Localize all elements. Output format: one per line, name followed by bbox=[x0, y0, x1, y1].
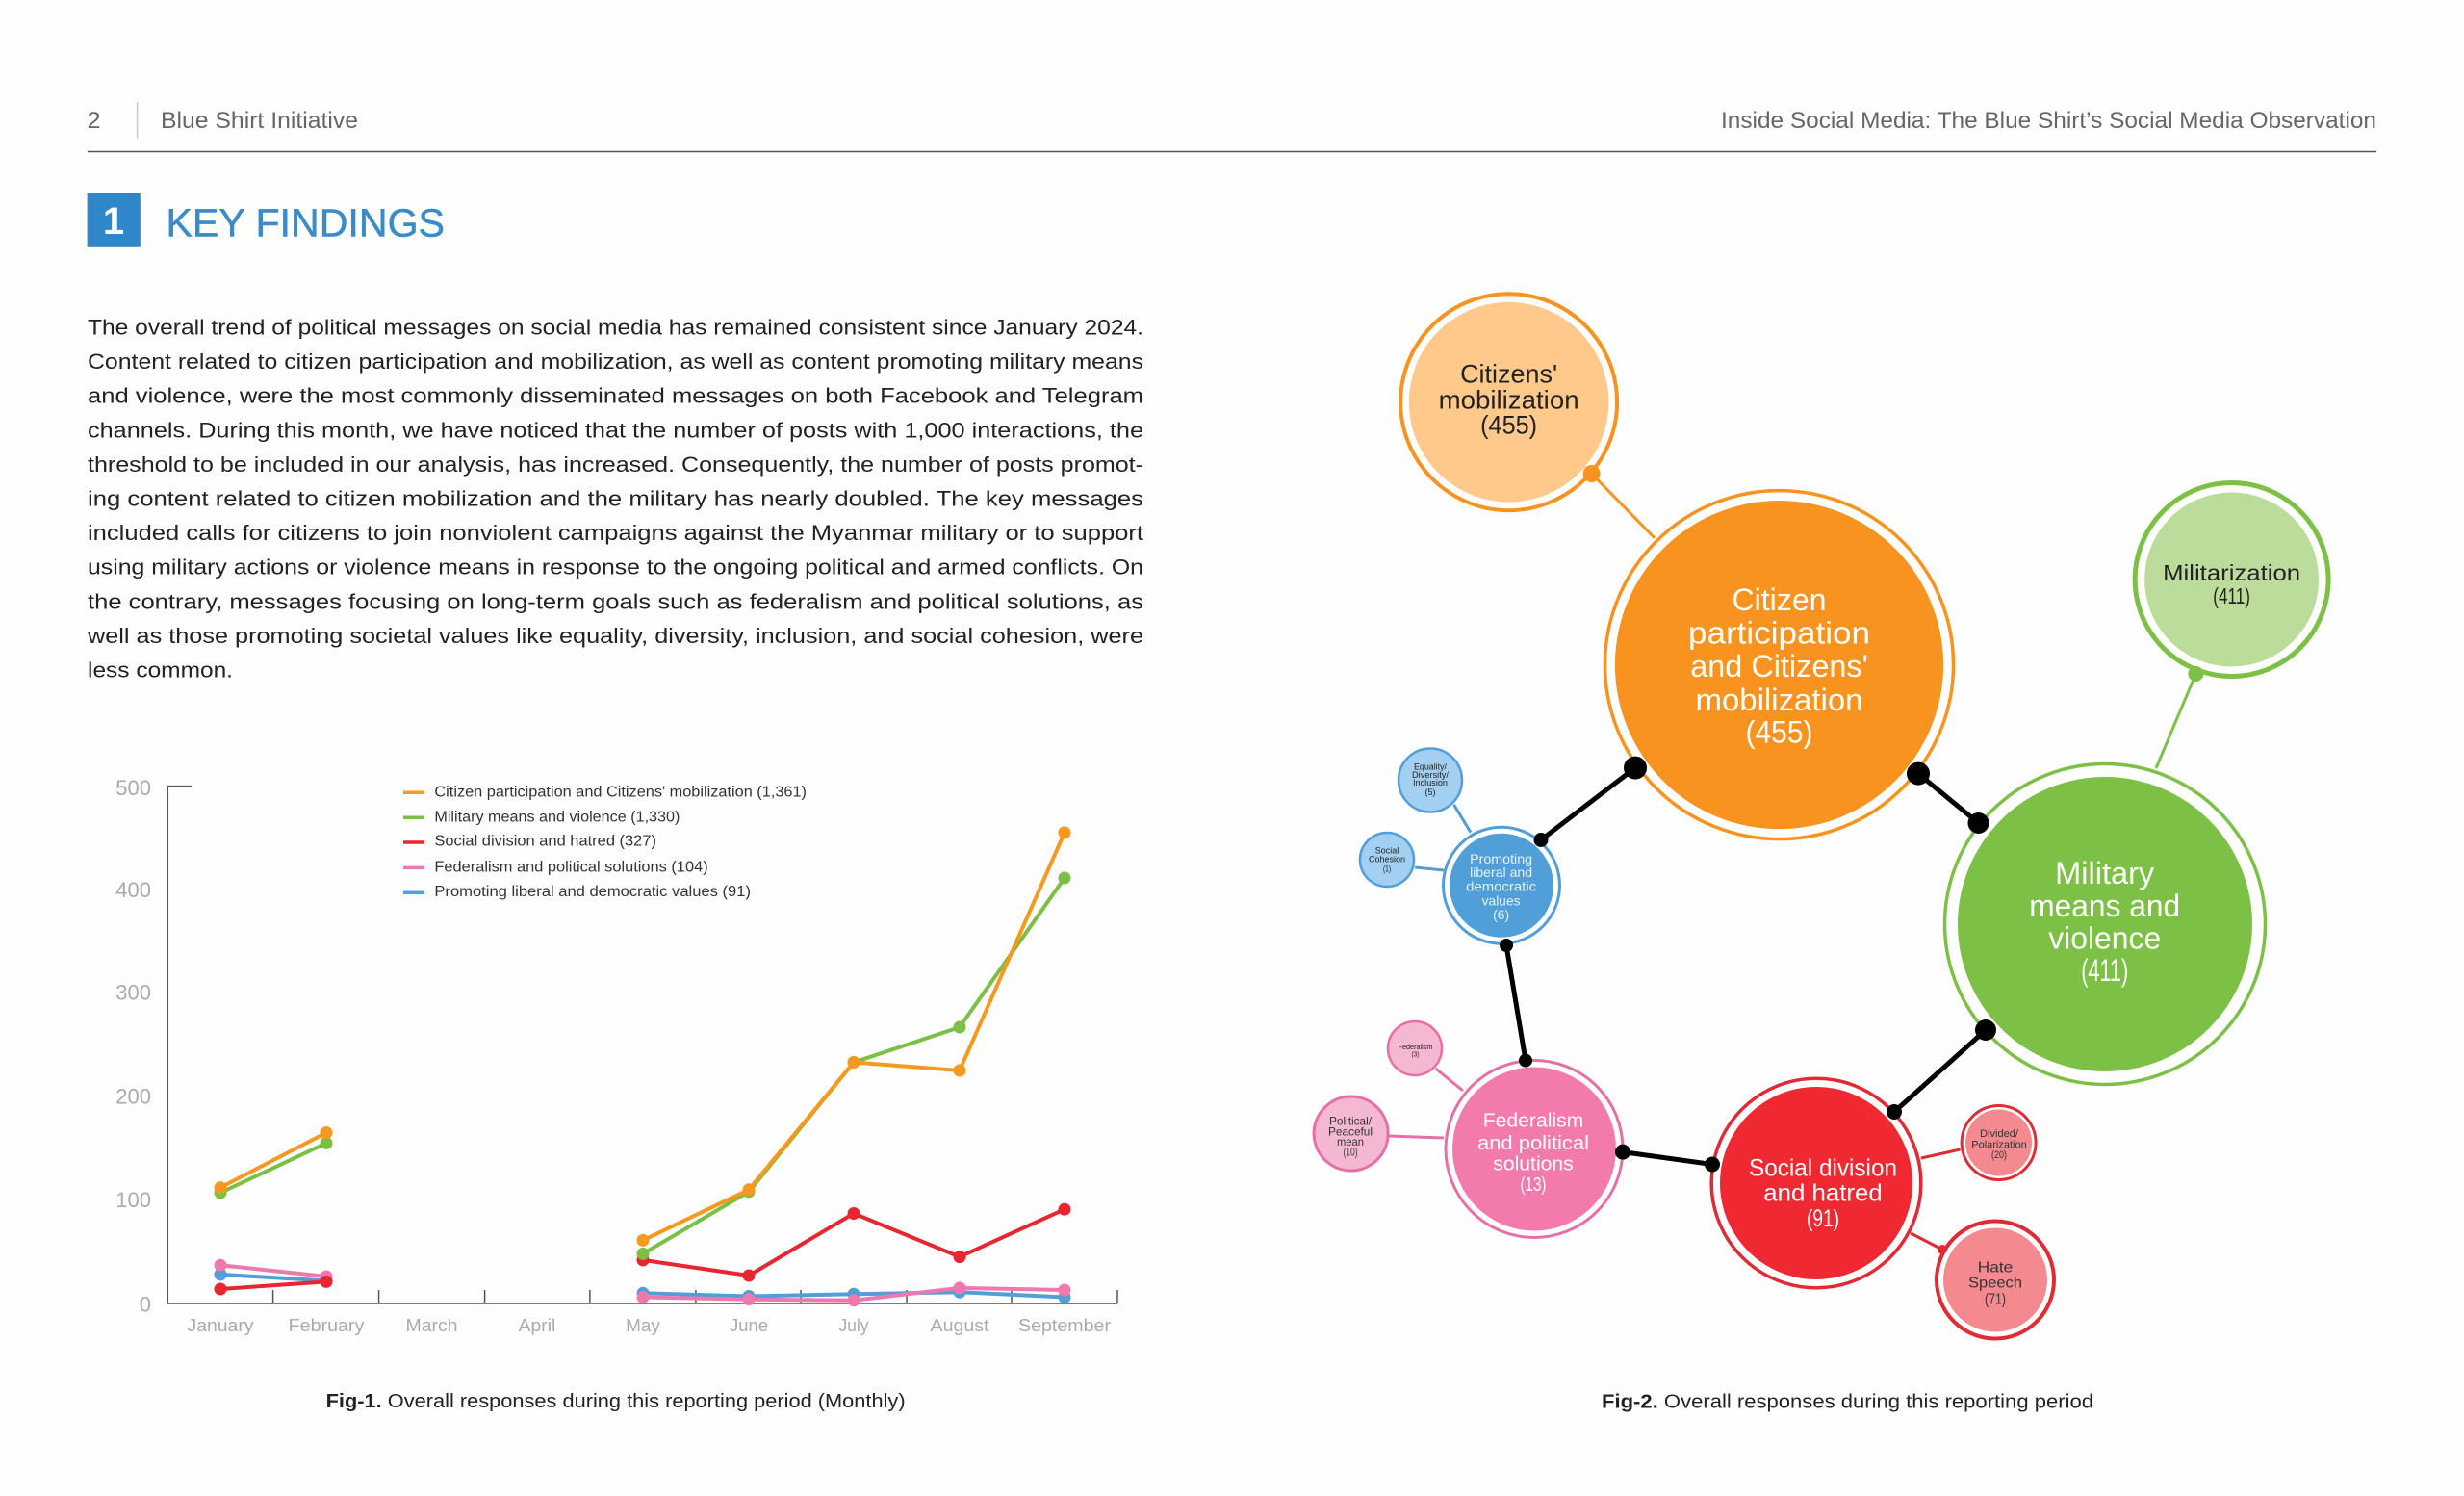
series: military means and violence bbox=[214, 872, 1070, 1260]
caption: figure 1: Fig-1. Overall responses during this reporting period (Monthly) bbox=[326, 1391, 906, 1412]
body paragraph: The overall trend of political messages on social media has remained consistent since January 2024. bbox=[88, 316, 1143, 339]
bubble: militarization: (411) bbox=[2213, 583, 2250, 608]
y axis labels: 100 bbox=[116, 1188, 151, 1212]
x axis labels: July bbox=[839, 1316, 868, 1335]
bubble: citizen participation: and Citizens' bbox=[1690, 649, 1868, 684]
chart legend: Promoting liberal and democratic values (91) bbox=[434, 884, 751, 900]
bubble: divided polarization: Polarization bbox=[1971, 1139, 2027, 1150]
bubble: militarization bbox=[2135, 483, 2328, 682]
body paragraph: and violence, were the most commonly disseminated messages on both Facebook and Telegram bbox=[88, 384, 1143, 408]
bubble: promoting liberal and democratic values: (6) bbox=[1493, 907, 1509, 922]
x axis labels: June bbox=[730, 1316, 768, 1335]
bubble: equality diversity inclusion: Equality/ bbox=[1414, 762, 1447, 772]
chart legend bbox=[403, 784, 807, 900]
bubble: federalism and political solutions: Federalism bbox=[1483, 1111, 1583, 1132]
body paragraph: less common. bbox=[88, 658, 233, 682]
bubble: promoting liberal and democratic values: Promoting bbox=[1470, 851, 1532, 866]
x axis labels: May bbox=[626, 1316, 660, 1335]
bubble: promoting liberal and democratic values: values bbox=[1482, 892, 1521, 908]
page header: Inside Social Media: The Blue Shirt’s Social Media Observation bbox=[1721, 108, 2376, 134]
bubble: divided polarization: Divided/ bbox=[1980, 1128, 2019, 1140]
body paragraph: channels. During this month, we have noticed that the number of posts with 1,000 interactions, the bbox=[88, 418, 1143, 442]
bubble: promoting liberal and democratic values: liberal and bbox=[1470, 864, 1532, 880]
x axis labels: August bbox=[930, 1316, 989, 1335]
x axis labels: March bbox=[406, 1316, 458, 1335]
section heading: key findings bbox=[88, 193, 445, 247]
bubble: military means and violence: Military bbox=[2055, 856, 2154, 890]
bubble: hate speech bbox=[1937, 1221, 2054, 1338]
connector end dots bbox=[1500, 757, 1996, 1173]
bubble: federalism and political solutions: solutions bbox=[1493, 1153, 1574, 1174]
body paragraph: the contrary, messages focusing on long-term goals such as federalism and political solutions, as bbox=[88, 589, 1143, 613]
bubble: militarization: Militarization bbox=[2163, 560, 2300, 585]
bubble: federalism: Federalism bbox=[1398, 1043, 1432, 1051]
bubble: social division and hatred bbox=[1711, 1078, 1921, 1288]
bubble: equality diversity inclusion: Inclusion bbox=[1413, 778, 1448, 788]
bubble: political peaceful mean bbox=[1314, 1096, 1388, 1171]
line chart: monthly responses bbox=[116, 776, 1117, 1335]
bubble: political peaceful mean: mean bbox=[1337, 1135, 1364, 1148]
bubble: social cohesion: (1) bbox=[1383, 864, 1391, 874]
series: promoting liberal and democratic values bbox=[214, 1268, 1070, 1303]
y axis labels: 200 bbox=[116, 1084, 151, 1109]
body paragraph: using military actions or violence means in response to the ongoing political and armed conflicts. On bbox=[88, 555, 1143, 580]
page header bbox=[87, 102, 2376, 152]
chart legend: Military means and violence (1,330) bbox=[434, 809, 680, 826]
bubble diagram: overall responses bbox=[1314, 294, 2328, 1339]
page header: Blue Shirt Initiative bbox=[161, 108, 358, 134]
bubble: promoting liberal and democratic values: democratic bbox=[1466, 879, 1536, 894]
bubble: divided polarization bbox=[1962, 1105, 2036, 1180]
bubble: social cohesion: Cohesion bbox=[1369, 855, 1405, 864]
bubble: political peaceful mean: Political/ bbox=[1329, 1115, 1373, 1128]
x axis labels: February bbox=[289, 1316, 364, 1335]
bubble: federalism and political solutions: (13) bbox=[1521, 1174, 1546, 1196]
series: citizen participation bbox=[214, 826, 1070, 1247]
bubble: equality diversity inclusion bbox=[1399, 749, 1462, 812]
thin connectors bbox=[1389, 474, 2195, 1250]
bubble: military means and violence: (411) bbox=[2081, 953, 2128, 988]
y axis labels: 300 bbox=[116, 980, 151, 1005]
bubble: political peaceful mean: Peaceful bbox=[1328, 1124, 1373, 1138]
bubble: federalism and political solutions: and political bbox=[1477, 1133, 1589, 1154]
bubble: citizens' mobilization: (455) bbox=[1480, 410, 1537, 439]
x axis labels bbox=[187, 1316, 1111, 1335]
bubble: federalism bbox=[1388, 1021, 1442, 1075]
bubble: hate speech: Hate bbox=[1978, 1259, 2013, 1277]
bubble: military means and violence: violence bbox=[2048, 920, 2161, 955]
bubble: citizen participation: Citizen bbox=[1732, 582, 1827, 617]
bubble: citizens' mobilization: mobilization bbox=[1439, 386, 1579, 415]
chart legend: Federalism and political solutions (104) bbox=[434, 859, 708, 876]
bubble: hate speech: Speech bbox=[1968, 1275, 2022, 1292]
body paragraph: Content related to citizen participation and mobilization, as well as content promoting military means bbox=[88, 349, 1143, 374]
section heading: key findings: KEY FINDINGS bbox=[166, 200, 445, 245]
bubble: citizen participation: participation bbox=[1688, 616, 1870, 651]
bubble: military means and violence bbox=[1944, 764, 2266, 1084]
series: social division and hatred bbox=[214, 1203, 1070, 1296]
body paragraph bbox=[87, 316, 1143, 682]
bubble: social cohesion bbox=[1360, 833, 1414, 887]
bubble: divided polarization: (20) bbox=[1991, 1149, 2007, 1161]
bubble: social division and hatred: Social division bbox=[1749, 1155, 1897, 1182]
chart legend: Social division and hatred (327) bbox=[434, 834, 656, 849]
body paragraph: threshold to be included in our analysis, has increased. Consequently, the number of posts promot- bbox=[88, 452, 1143, 477]
bubble: hate speech: (71) bbox=[1985, 1292, 2006, 1307]
bubble: social cohesion: Social bbox=[1375, 845, 1399, 857]
bubble: equality diversity inclusion: Diversity/ bbox=[1412, 770, 1449, 781]
caption: figure 2: Fig-2. Overall responses during this reporting period bbox=[1602, 1392, 2093, 1413]
y axis labels: 500 bbox=[116, 776, 151, 800]
bubble: political peaceful mean: (10) bbox=[1344, 1146, 1357, 1159]
bubble: citizen participation bbox=[1605, 491, 1954, 839]
bubble: citizen participation: mobilization bbox=[1696, 683, 1863, 717]
bubble: citizen participation: (455) bbox=[1746, 714, 1813, 749]
x axis labels: January bbox=[187, 1316, 254, 1335]
chart axes bbox=[167, 787, 1117, 1303]
body paragraph: well as those promoting societal values like equality, diversity, inclusion, and social cohesion, were bbox=[87, 624, 1143, 648]
bubble: equality diversity inclusion: (5) bbox=[1424, 787, 1436, 798]
x axis labels: April bbox=[519, 1316, 555, 1335]
section heading: key findings: 1 bbox=[103, 200, 124, 243]
bubble: federalism: (3) bbox=[1411, 1049, 1420, 1059]
series: federalism and political solutions bbox=[214, 1259, 1070, 1306]
bubble: social division and hatred: (91) bbox=[1807, 1205, 1839, 1232]
page header: 2 bbox=[87, 108, 100, 134]
bubble: federalism and political solutions bbox=[1446, 1061, 1623, 1238]
y axis labels: 0 bbox=[140, 1292, 151, 1317]
x axis labels: September bbox=[1018, 1316, 1111, 1335]
bubble: military means and violence: means and bbox=[2029, 889, 2180, 923]
bubble: social division and hatred: and hatred bbox=[1763, 1179, 1883, 1206]
bubble: citizens' mobilization: Citizens' bbox=[1460, 360, 1557, 389]
y axis labels: 400 bbox=[116, 878, 151, 902]
body paragraph: included calls for citizens to join nonviolent campaigns against the Myanmar military or to support bbox=[88, 521, 1143, 545]
body paragraph: ing content related to citizen mobilization and the military has nearly doubled. The key messages bbox=[88, 487, 1143, 510]
chart legend: Citizen participation and Citizens' mobilization (1,361) bbox=[434, 784, 807, 801]
bubble: citizens' mobilization bbox=[1400, 294, 1617, 510]
y axis labels bbox=[116, 776, 151, 1317]
bubble: promoting liberal and democratic values bbox=[1444, 827, 1559, 943]
black connectors bbox=[1506, 768, 1986, 1165]
